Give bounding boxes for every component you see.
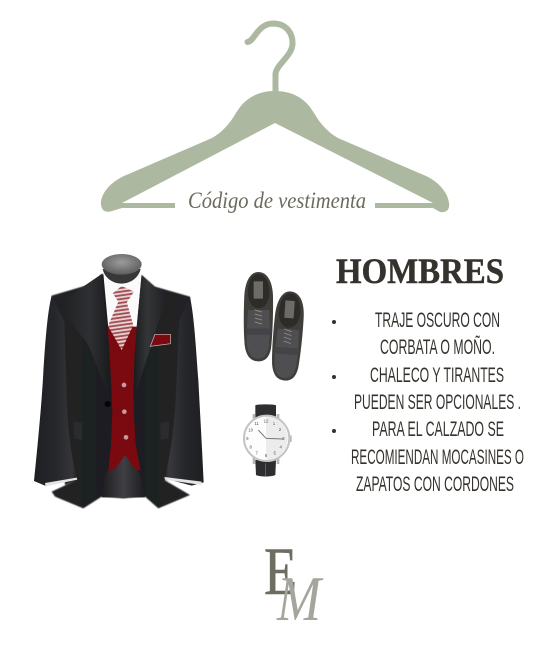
dial numerals: 4 <box>279 444 282 449</box>
dial numerals: 11 <box>254 421 260 426</box>
right lapel <box>133 275 168 400</box>
waistcoat <box>108 327 141 471</box>
mannequin cap <box>102 254 142 275</box>
left shoe <box>244 272 273 361</box>
left lapel <box>58 274 111 400</box>
pocket flaps <box>73 422 169 440</box>
shirt cuffs <box>45 477 202 486</box>
dial numerals: 7 <box>255 450 258 455</box>
bullet: chaleco <box>332 364 521 414</box>
dial numerals: 9 <box>246 436 249 441</box>
icon: clothes hanger <box>101 24 449 212</box>
dial numerals <box>246 418 285 458</box>
bullet list <box>332 309 524 496</box>
right sleeve <box>164 297 204 486</box>
bullet: calzado <box>332 418 524 496</box>
heading: HOMBRES <box>336 251 504 291</box>
watch hands <box>258 430 283 439</box>
icon: suit jacket <box>34 254 204 508</box>
jacket body <box>52 274 190 508</box>
icon: dress shoes <box>244 272 305 382</box>
hanger caption: Código de vestimenta <box>188 188 366 213</box>
left sleeve <box>34 296 77 486</box>
dial numerals: 8 <box>249 444 252 449</box>
dial numerals: 6 <box>265 453 268 458</box>
waistcoat buttons <box>122 383 128 440</box>
dial <box>244 416 289 461</box>
neck form <box>103 269 141 284</box>
jacket button <box>105 401 111 407</box>
logo monogram: E <box>264 533 297 609</box>
logo monogram <box>264 533 324 634</box>
dial numerals: 12 <box>264 418 269 423</box>
logo monogram: M <box>276 563 324 634</box>
dial numerals: 10 <box>248 428 254 433</box>
strap <box>255 404 276 477</box>
tie <box>108 286 134 350</box>
bullet: traje <box>332 309 500 359</box>
dial numerals: 1 <box>273 421 276 426</box>
shirt <box>103 273 142 328</box>
right shoe <box>270 290 305 382</box>
inner lining <box>102 455 145 497</box>
dial numerals: 3 <box>282 436 285 441</box>
lugs and crown <box>253 414 292 464</box>
pocket square <box>150 334 170 346</box>
dial numerals: 5 <box>273 450 276 455</box>
dial numerals: 2 <box>279 427 282 432</box>
icon: wristwatch <box>244 404 292 477</box>
